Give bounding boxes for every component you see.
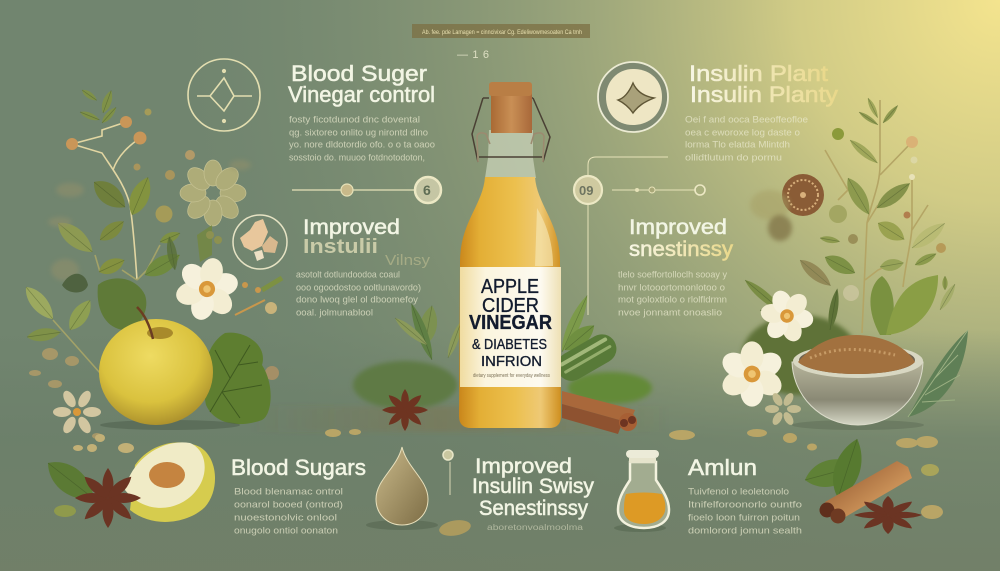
body text: qg. sixtoreo onlito ug nirontd dlno (289, 128, 428, 138)
leaves (20, 87, 184, 343)
body text: hnvr lotooortomonlotoo o (618, 282, 725, 294)
panel: blood sugar vinegar control (188, 59, 441, 203)
glass neck (485, 130, 536, 178)
main plant stem with berries (53, 108, 195, 373)
body text: tlelo soeffortolloclh sooay y (618, 270, 727, 280)
connector with number badge (292, 177, 441, 203)
heading: Improved (629, 216, 727, 239)
heading: Vinegar control (288, 82, 435, 107)
body text: fioelo loon fuirron poitun (688, 512, 800, 524)
caption: aboretonvoalmoolma (487, 523, 584, 532)
body text: nvoe jonnamt onoaslio (618, 308, 722, 318)
cork (489, 82, 532, 133)
body text: Oei f and ooca Beeoffeofloe (685, 114, 808, 126)
label: & DIABETES (472, 336, 547, 353)
right botanical arrangement (707, 97, 968, 430)
body text (618, 270, 727, 318)
heading (303, 216, 431, 269)
body text (685, 114, 808, 164)
icon: flask (614, 450, 669, 532)
half apple with star anise (40, 434, 215, 528)
top caption strip (412, 24, 590, 38)
top tick number: —16 (457, 49, 489, 61)
left botanical arrangement (20, 87, 282, 439)
body text (296, 270, 421, 318)
leaf behind apple (98, 278, 146, 330)
label: VINEGAR (469, 312, 553, 334)
white flower (168, 249, 246, 329)
lace flower (180, 160, 246, 226)
bottle (459, 82, 561, 428)
dried herbs (48, 160, 251, 281)
scattered seeds (54, 434, 134, 517)
fern (908, 330, 968, 417)
heading (288, 61, 435, 107)
heading: Blood Sugars (231, 455, 366, 480)
body text: fosty ficotdunod dnc dovental (289, 114, 420, 126)
body text: ooal. jolmunablool (296, 308, 373, 318)
wire bale (472, 98, 550, 162)
star anise beside bottle (382, 389, 428, 431)
bowl of seeds (792, 335, 924, 430)
bottle highlight (535, 208, 553, 266)
label: APPLE (481, 276, 539, 298)
heading (472, 455, 594, 520)
scattered seeds along the floor (325, 429, 943, 519)
white flowers (707, 284, 818, 420)
dried herb cluster (750, 190, 859, 301)
heading: Blood Suger (291, 61, 427, 86)
panel: improved sensitivity right (618, 216, 734, 318)
panel: blood sugars (40, 434, 438, 536)
heading (689, 61, 838, 107)
panel: improved insulin left (233, 215, 431, 318)
body text: Tuivfenol o leoletonolo (688, 486, 789, 498)
label: CIDER (482, 295, 539, 317)
liquid (459, 177, 561, 428)
label: dietary supplement for everyday wellness (473, 373, 550, 379)
heading: Insulin Swisy (472, 475, 594, 498)
connector with number badge: 6 (423, 182, 431, 198)
body text: yo. nore dldotordio ofo. o o ta oaoo (289, 140, 435, 150)
yellow apple (99, 307, 240, 430)
cucumber (552, 329, 622, 386)
stems and berries (825, 100, 946, 333)
icon: ingredient pieces in circle (233, 215, 287, 269)
body text: oea c eworoxe log daste o (685, 128, 800, 138)
cinnamon, leaf and anise (802, 435, 922, 534)
body text: lorma Tlo elatda Mlintdh (685, 140, 790, 150)
leaves (819, 97, 958, 312)
cinnamon sticks beside bottle (562, 391, 637, 434)
small seeds (29, 348, 102, 439)
heading: Improved (303, 216, 400, 239)
body text: dono lwoq glel ol dboomefoy (296, 294, 418, 306)
body text (289, 114, 435, 164)
leaf right of apple (204, 333, 271, 424)
heading: Improved (475, 455, 572, 478)
small beige flower (765, 391, 801, 427)
icon: plant seed in circle (598, 62, 668, 132)
body text: domlorord jomun sealth (688, 526, 802, 536)
cluster of herbs (197, 225, 282, 380)
icon: diamond in circle (188, 59, 260, 131)
connector with number badge (574, 157, 705, 315)
apple half (130, 442, 215, 522)
heading: Vilnsy (385, 252, 431, 269)
indicator (443, 450, 453, 495)
body text: ooo ogoodostoo ooltlunavordo) (296, 282, 421, 294)
body text: ollidtlutum do pormu (685, 152, 782, 164)
body text (234, 486, 343, 536)
label: INFRION (481, 353, 542, 370)
connector with number badge: 09 (579, 183, 593, 198)
body text (688, 486, 802, 536)
panel: improved insulin sensitivity (438, 450, 594, 538)
body text: nuoestonolvic onlool (234, 512, 337, 524)
medallion seed (782, 174, 824, 216)
panel: insulin plant (574, 61, 838, 315)
dark foliage (742, 276, 858, 395)
body text: oonarol booed (ontrod) (234, 500, 343, 510)
label (460, 267, 561, 387)
icon: drop (366, 447, 438, 530)
heading: Instulii (303, 236, 378, 258)
broad green leaves (870, 275, 938, 335)
dark foliage (62, 274, 88, 292)
small beige flower (53, 389, 101, 435)
top caption strip: Ab. fee. pde Lamagen = cinncivixar Cg. Edeliwowmesoaten Ca tmh (422, 29, 582, 36)
panel: amlun (614, 435, 922, 536)
body text: Itnifelforoonorlo ountfo (688, 500, 802, 510)
body text: Blood blenamac ontrol (234, 486, 343, 498)
heading: Insulin Plant (689, 61, 828, 86)
heading: Insulin Planty (690, 82, 838, 107)
body text: asotolt dotlundoodoa coaul (296, 270, 400, 280)
seed (438, 518, 472, 538)
plants behind bottle (353, 293, 652, 409)
heading (629, 216, 734, 261)
heading: Amlun (688, 455, 757, 480)
heading: snestinssy (629, 238, 734, 261)
body text: onugolo ontiol oonaton (234, 526, 338, 536)
body text: sosstoio do. muuoo fotdnotodoton, (289, 152, 425, 164)
star anise (75, 468, 141, 528)
heading: Senestinssy (479, 497, 588, 520)
body text: mot goloxtlolo o rlolfldrmn (618, 294, 727, 306)
green leaf (40, 453, 102, 509)
